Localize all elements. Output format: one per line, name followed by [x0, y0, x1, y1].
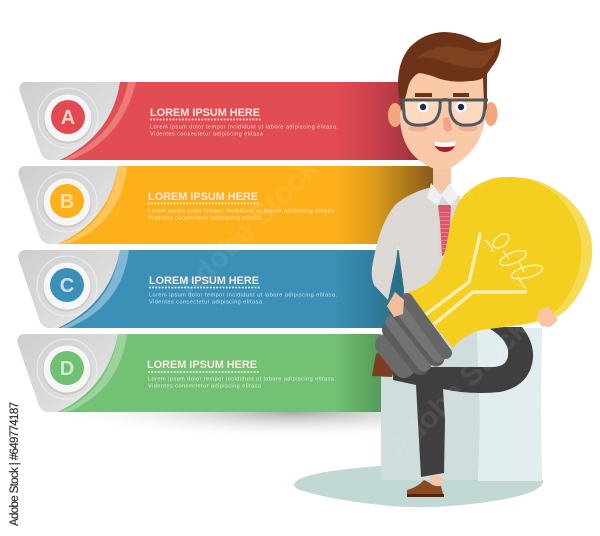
tie — [438, 205, 451, 256]
watermark: Adobe Stock — [382, 312, 535, 465]
left hand — [387, 292, 404, 317]
watermark: Adobe Stock — [172, 152, 325, 305]
left ear — [388, 103, 402, 127]
panel: banner D — [18, 334, 381, 412]
icon: badge C: C — [60, 275, 74, 297]
nose — [443, 117, 452, 132]
text B: Lorem ipsum dolor tempor incididunt ut labore adipiscing elitasa. — [148, 208, 336, 214]
text C: Videntes consectetur adipiscing elitasa — [149, 300, 263, 306]
floor shadow — [294, 466, 543, 507]
hair highlight — [416, 44, 498, 68]
icon: badge A — [38, 88, 98, 148]
cheeks — [408, 124, 478, 132]
icon: badge D: D — [60, 358, 74, 380]
banner shadow — [60, 412, 385, 448]
panel: banner C — [19, 250, 404, 328]
glasses bridge — [400, 100, 488, 101]
stock credit: Adobe Stock | #649774187 — [9, 402, 21, 526]
teeth — [433, 141, 456, 147]
glasses — [403, 100, 485, 125]
panel: banner B — [19, 166, 434, 244]
standing ankle — [430, 476, 444, 486]
icon: badge A: A — [61, 107, 75, 129]
face — [400, 68, 485, 170]
mouth — [433, 141, 456, 152]
neck — [433, 165, 451, 198]
watermark: Adobe — [452, 116, 541, 205]
icon: badge C — [37, 256, 97, 316]
dotted divider D — [148, 371, 259, 373]
text D: Lorem ipsum dolor tempor incididunt ut labore adipiscing elitasa. — [148, 376, 336, 382]
text A: Videntes consectetur adipiscing elitasa — [150, 132, 264, 138]
text A: Lorem ipsum dolor tempor incididunt ut labore adipiscing elitasa. — [150, 124, 338, 130]
sweater — [372, 188, 470, 315]
panel: banner A — [20, 82, 428, 160]
text D: Videntes consectetur adipiscing elitasa — [148, 384, 262, 390]
dotted divider C — [149, 286, 260, 288]
bulb glass highlight — [407, 177, 592, 348]
character: businessman — [372, 32, 533, 497]
dotted divider A — [150, 118, 261, 120]
heading B: LOREM IPSUM HERE — [148, 191, 258, 203]
heading C: LOREM IPSUM HERE — [149, 275, 259, 287]
filament coil — [485, 231, 544, 289]
shoe sole — [407, 494, 444, 497]
heading D: LOREM IPSUM HERE — [147, 359, 257, 371]
text C: Lorem ipsum dolor tempor incididunt ut labore adipiscing elitasa. — [149, 292, 337, 298]
eyes — [418, 102, 466, 112]
icon: badge D — [37, 339, 97, 399]
watermark — [172, 116, 541, 465]
text B: Videntes consectetur adipiscing elitasa — [148, 216, 262, 222]
eyebrows — [415, 93, 469, 97]
right hand — [537, 306, 558, 327]
dotted divider B — [148, 202, 259, 204]
tie stripes — [440, 212, 450, 254]
collar — [427, 183, 458, 206]
standing shoe — [407, 480, 444, 497]
filament supports — [425, 234, 525, 325]
icon: giant light bulb — [386, 177, 592, 367]
raised shoe — [372, 352, 395, 377]
heading A: LOREM IPSUM HERE — [150, 107, 260, 119]
icon: badge B: B — [60, 191, 74, 213]
raised leg — [393, 327, 533, 477]
icon: badge B — [37, 172, 97, 232]
hair — [398, 32, 501, 112]
cube pedestal — [381, 328, 542, 481]
right ear — [484, 102, 498, 126]
bulb glass — [407, 177, 582, 348]
socket — [386, 299, 446, 367]
